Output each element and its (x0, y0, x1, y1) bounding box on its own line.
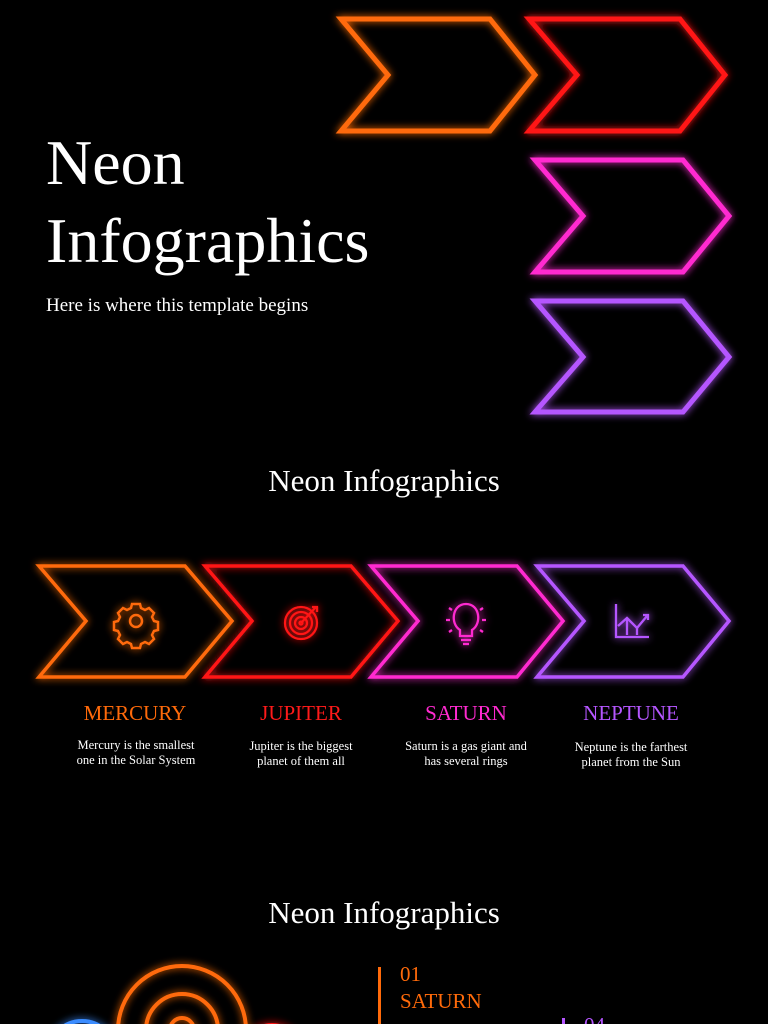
chevron: purple (535, 301, 729, 412)
section heading 2: Neon Infographics (268, 895, 500, 930)
label: neptune: Neptune is the farthest (575, 740, 688, 754)
label: mercury: one in the Solar System (77, 753, 196, 767)
circles diagram (48, 966, 302, 1024)
label: jupiter: planet of them all (257, 754, 345, 768)
section heading 1: Neon Infographics (268, 463, 500, 498)
icon: gear (114, 604, 158, 648)
chevron: orange (341, 19, 535, 131)
label: mercury: MERCURY (84, 701, 186, 725)
chevron: red (529, 19, 725, 131)
icon: target (285, 607, 317, 639)
subtitle: Here is where this template begins (46, 295, 308, 316)
label: saturn: has several rings (424, 754, 508, 768)
title: Neon (46, 127, 185, 198)
label: neptune: planet from the Sun (582, 755, 681, 769)
label: saturn: Saturn is a gas giant and (405, 739, 528, 753)
label: neptune: NEPTUNE (583, 701, 679, 725)
step labels (77, 701, 688, 769)
title (46, 127, 369, 276)
icon: chart (616, 604, 649, 637)
label: mercury: Mercury is the smallest (78, 738, 195, 752)
top chevrons (341, 19, 729, 412)
chevron step: mercury (39, 566, 232, 677)
list item: 01 saturn (378, 962, 482, 1024)
chevron step: saturn (371, 566, 563, 677)
list item: 01 saturn: 01 (400, 962, 421, 986)
chevron: pink (535, 160, 729, 272)
label: mercury (77, 701, 196, 767)
label: neptune (575, 701, 688, 769)
list item: 04 (562, 1013, 606, 1024)
label: saturn (405, 701, 528, 768)
chevron step: jupiter (205, 566, 398, 677)
label: jupiter (249, 701, 353, 768)
icon: lightbulb (446, 604, 486, 644)
title: Infographics (46, 205, 369, 276)
list item: 01 saturn: SATURN (400, 989, 482, 1013)
label: jupiter: JUPITER (260, 701, 342, 725)
label: saturn: SATURN (425, 701, 507, 725)
chevron step: neptune (537, 566, 729, 677)
label: jupiter: Jupiter is the biggest (249, 739, 353, 753)
process chevrons (39, 566, 729, 677)
